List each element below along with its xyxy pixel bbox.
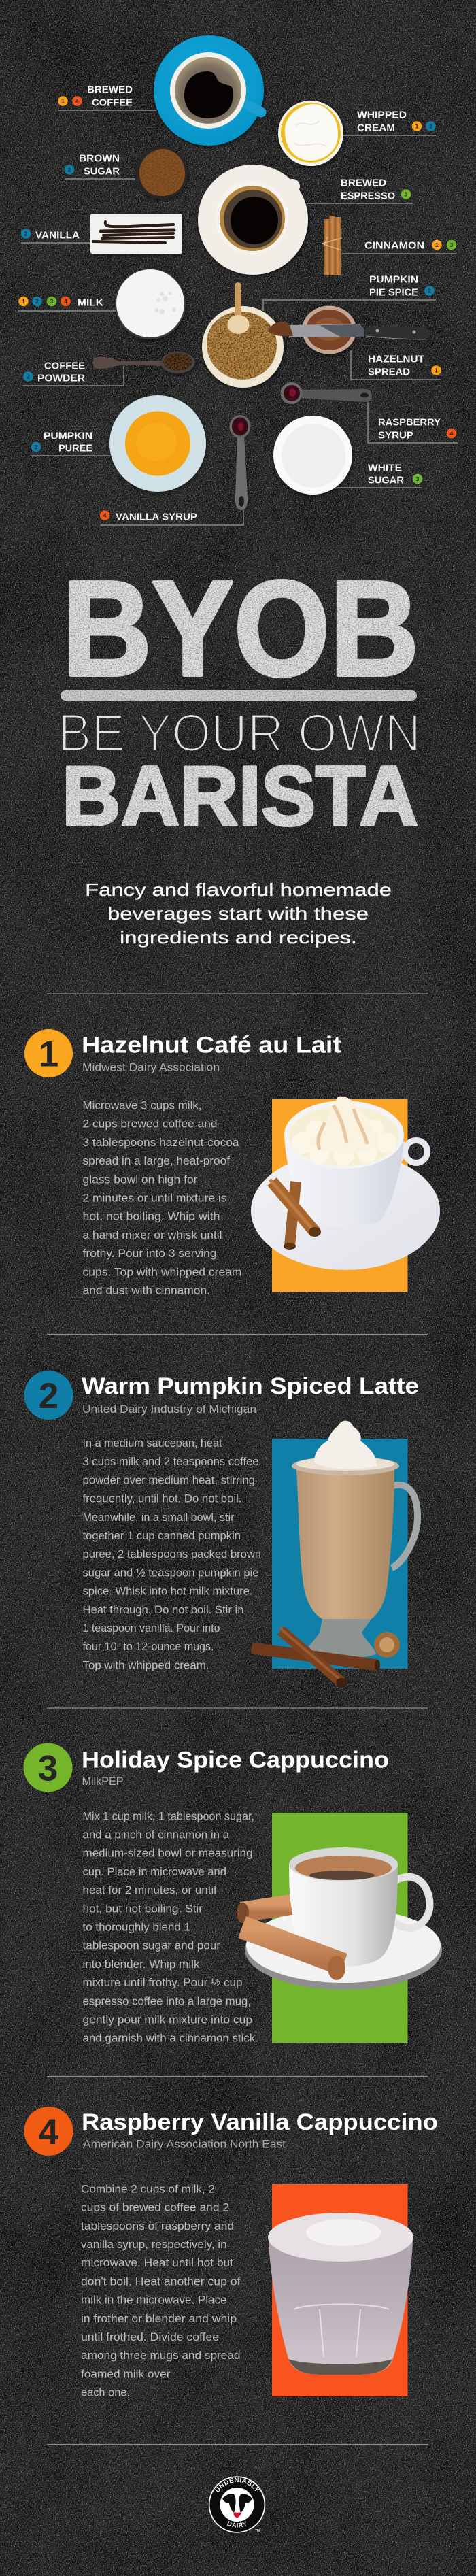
logo: Undeniably Dairy: [208, 2476, 265, 2533]
text block: recipe 2 directions: Meanwhile, in a small bowl, stir: [83, 1511, 235, 1524]
logo: Undeniably Dairy: UNDENIABLY: [215, 2477, 260, 2492]
text block: recipe 2 directions: spice. Whisk into hot milk mixture.: [83, 1586, 253, 1598]
text block: recipe 2 directions: sugar and ½ teaspoon pumpkin pie: [83, 1567, 258, 1579]
callout: white sugar: SUGAR: [368, 475, 404, 486]
callout: brewed coffee: [58, 84, 156, 110]
text block: recipe 1 directions: 2 minutes or until mixture is: [83, 1192, 227, 1204]
text block: recipe 1 directions: cups. Top with whipped cream: [83, 1266, 242, 1278]
title: BYOB Be Your Own Barista: BARISTA: [62, 750, 418, 843]
text block: recipe 4 directions: each one.: [81, 2387, 130, 2399]
text block: recipe 3 directions: to thoroughly blend 1: [83, 1921, 190, 1933]
text block: recipe 1 directions: a hand mixer or whisk until: [83, 1229, 222, 1241]
text block: recipe 2 directions: powder over medium heat, stirring: [83, 1474, 255, 1486]
text block: recipe 1 directions: 3 tablespoons hazelnut-cocoa: [83, 1137, 239, 1149]
callout: milk: 2: [35, 298, 39, 305]
text block: recipe 2 directions: [83, 1437, 261, 1671]
image: frothy glass on orange panel: [268, 2184, 413, 2396]
text block: recipe 4 directions: [81, 2183, 241, 2399]
text block: recipe 1 directions: hot, not boiling. Whip with: [83, 1211, 220, 1223]
callout: milk: 3: [50, 298, 54, 305]
icon: milk bowl: [115, 269, 186, 339]
callout: milk: [18, 297, 116, 311]
icon: brown sugar bowl: [135, 147, 188, 199]
callout: raspberry syrup: [368, 402, 458, 443]
text block: recipe 3 directions: tablespoon sugar and pour: [83, 1940, 221, 1952]
callout: cinnamon: 1: [435, 241, 439, 248]
icon: pumpkin pie spice bowl with wooden spoon: [202, 286, 284, 388]
callout: hazelnut spread: [351, 350, 441, 380]
callout: raspberry syrup: RASPBERRY: [378, 416, 441, 429]
text block: recipe 4 directions: microwave. Heat until hot but: [81, 2257, 233, 2269]
heading: recipe 2: Warm Pumpkin Spiced Latte: [82, 1373, 419, 1399]
callout: brewed espresso: 3: [405, 190, 408, 197]
text block: recipe 4 directions: milk in the microwave. Place: [81, 2294, 227, 2307]
callout: coffee powder: COFFEE: [44, 361, 85, 371]
text block: recipe 4 directions: tablespoons of raspberry and: [81, 2220, 234, 2232]
callout: raspberry syrup: 4: [450, 430, 454, 437]
callout: pumpkin pie spice: PIE SPICE: [369, 287, 418, 298]
text block: recipe 3 directions: medium-sized bowl or measuring: [83, 1847, 253, 1860]
text block: recipe 4 directions: cups of brewed coffee and 2: [81, 2202, 229, 2214]
callout: milk: MILK: [78, 297, 103, 309]
callout: pumpkin pie spice: PUMPKIN: [369, 273, 418, 286]
text block: recipe 2 directions: Top with whipped cream.: [83, 1659, 209, 1671]
callout: pumpkin pie spice: 2: [428, 287, 431, 294]
callout: brewed espresso: [307, 177, 413, 203]
callout: whipped cream: [343, 109, 436, 135]
callout: cinnamon: CINNAMON: [364, 239, 424, 252]
callout: white sugar: [337, 463, 422, 488]
tagline: [85, 880, 392, 948]
title: BYOB Be Your Own Barista: BE YOUR OWN: [58, 703, 421, 763]
callout: brewed coffee: BREWED: [87, 84, 133, 95]
text block: recipe 2 directions: four 10- to 12-ounce mugs.: [83, 1641, 214, 1653]
icon: coffee powder spoon: [93, 352, 194, 373]
callout: brewed coffee: 1: [61, 98, 65, 105]
text block: recipe 3 directions: and garnish with a cinnamon stick.: [83, 2033, 258, 2045]
text block: recipe 4 directions: until frothed. Divide coffee: [81, 2331, 219, 2343]
callout: pumpkin puree: PUREE: [58, 442, 92, 454]
image: cappuccino cup on green panel: [237, 1813, 442, 2043]
icon: vanilla syrup measuring spoon: [230, 415, 250, 510]
badge: number 1: 1: [39, 1034, 58, 1075]
text block: recipe 3 directions: [83, 1810, 258, 2045]
icon: pumpkin puree plate: [109, 395, 206, 492]
logo: Undeniably Dairy: TM: [255, 2529, 260, 2533]
callout: whipped cream: WHIPPED: [357, 109, 407, 121]
text block: recipe 1 directions: and dust with cinnamon.: [83, 1284, 210, 1297]
text block: recipe 2 directions: In a medium saucepan, heat: [83, 1437, 222, 1450]
callout: coffee powder: POWDER: [37, 373, 85, 384]
callout: brewed coffee: 4: [75, 98, 79, 105]
callout: pumpkin puree: PUMPKIN: [44, 430, 92, 442]
text block: recipe 2 directions: 3 cups milk and 2 teaspoons coffee: [83, 1456, 258, 1468]
panel: recipe 2 Warm Pumpkin Spiced Latte: [24, 1371, 419, 1688]
tagline: ingredients and recipes.: [120, 927, 357, 948]
callout: vanilla syrup: 4: [103, 512, 107, 518]
icon: whipped cream in yellow bowl: [278, 101, 343, 166]
icon: white sugar plate: [273, 416, 352, 495]
text block: recipe 3 directions: into blender. Whip milk: [83, 1958, 200, 1971]
source: recipe 2: United Dairy Industry of Michigan: [82, 1403, 256, 1416]
image: latte glass on blue panel: [252, 1421, 418, 1688]
heading: recipe 3: Holiday Spice Cappuccino: [82, 1747, 389, 1773]
source: recipe 4: American Dairy Association North East: [83, 2137, 286, 2151]
callout: brown sugar: [65, 152, 135, 179]
icon: raspberry syrup measuring spoon: [280, 382, 372, 404]
text block: recipe 4 directions: vanilla syrup, respectively, in: [81, 2239, 227, 2251]
callout: milk: 4: [64, 298, 67, 305]
badge: number 4: [24, 2107, 73, 2156]
source: recipe 3: MilkPEP: [82, 1775, 124, 1788]
callout: brown sugar: 2: [68, 166, 71, 173]
callout: vanilla: [21, 229, 90, 243]
heading: recipe 4: Raspberry Vanilla Cappuccino: [82, 2109, 438, 2135]
text block: recipe 4 directions: foamed milk over: [81, 2368, 171, 2380]
callout: hazelnut spread: SPREAD: [368, 366, 410, 378]
callout: brown sugar: SUGAR: [84, 166, 120, 177]
text block: recipe 2 directions: puree, 2 tablespoons packed brown: [83, 1548, 261, 1560]
callout: pumpkin puree: 2: [35, 444, 38, 450]
badge: number 3: [23, 1743, 72, 1792]
callout: brewed espresso: ESPRESSO: [341, 190, 395, 201]
text block: recipe 4 directions: Combine 2 cups of milk, 2: [81, 2183, 215, 2195]
callout: pumpkin puree: [31, 430, 110, 456]
icon: brewed coffee in blue cup: [154, 35, 264, 146]
text block: recipe 3 directions: Mix 1 cup milk, 1 tablespoon sugar,: [83, 1810, 254, 1822]
callout: cinnamon: 3: [450, 241, 454, 248]
text block: recipe 3 directions: and a pinch of cinnamon in a: [83, 1828, 230, 1841]
icon: cinnamon sticks bundle: [322, 216, 342, 275]
text block: recipe 3 directions: hot, but not boiling. Stir: [83, 1903, 203, 1915]
title: BYOB Be Your Own Barista: [58, 554, 421, 843]
tagline: beverages start with these: [107, 903, 369, 924]
callout: coffee powder: [23, 361, 124, 386]
panel: recipe 4 Raspberry Vanilla Cappuccino: [24, 2107, 438, 2399]
callout: coffee powder: 2: [27, 373, 30, 380]
tagline: Fancy and flavorful homemade: [85, 880, 392, 900]
callout: vanilla: 2: [24, 230, 28, 237]
callout: whipped cream: CREAM: [357, 122, 395, 133]
text block: recipe 1 directions: glass bowl on high for: [83, 1173, 198, 1186]
callout: vanilla: VANILLA: [35, 230, 80, 241]
icon: espresso cup and white saucer: [198, 165, 308, 275]
callout: cinnamon: [342, 239, 456, 254]
callout: brewed espresso: BREWED: [341, 177, 386, 189]
badge: number 3: 3: [38, 1748, 58, 1789]
callout: white sugar: WHITE: [368, 463, 402, 473]
callout: pumpkin pie spice: [263, 273, 436, 311]
text block: recipe 1 directions: [83, 1099, 242, 1297]
source: recipe 1: Midwest Dairy Association: [82, 1061, 220, 1073]
callout: whipped cream: 2: [429, 122, 432, 129]
callout: milk: 1: [22, 298, 25, 305]
text block: recipe 2 directions: Heat through. Do not boil. Stir in: [83, 1604, 243, 1616]
text block: recipe 3 directions: mixture until frothy. Pour ½ cup: [83, 1977, 242, 1989]
text block: recipe 1 directions: spread in a large, heat-proof: [83, 1155, 230, 1167]
callout: white sugar: 3: [416, 475, 420, 482]
text block: recipe 2 directions: together 1 cup canned pumpkin: [83, 1530, 241, 1542]
callout: vanilla syrup: VANILLA SYRUP: [116, 512, 197, 522]
badge: number 2: 2: [39, 1376, 58, 1416]
callout: vanilla syrup: [100, 510, 243, 525]
icon: vanilla pods on white plate: [90, 214, 182, 254]
text block: recipe 4 directions: in frother or blender and whip: [81, 2313, 237, 2325]
text block: recipe 4 directions: don't boil. Heat another cup of: [81, 2275, 241, 2288]
image: cup with whipped cream on orange panel: [251, 1097, 440, 1292]
callout: whipped cream: 1: [415, 122, 419, 129]
panel: recipe 3 Holiday Spice Cappuccino: [23, 1743, 442, 2045]
text block: recipe 1 directions: Microwave 3 cups milk,: [83, 1099, 201, 1111]
callout: raspberry syrup: SYRUP: [378, 430, 413, 441]
heading: recipe 1: Hazelnut Café au Lait: [82, 1033, 341, 1058]
callout: brown sugar: BROWN: [79, 152, 120, 165]
text block: recipe 3 directions: cup. Place in microwave and: [83, 1866, 226, 1878]
badge: number 1: [24, 1029, 73, 1077]
text block: recipe 4 directions: among three mugs and spread: [81, 2349, 241, 2362]
logo: Undeniably Dairy: DAIRY: [227, 2521, 246, 2528]
callout: brewed coffee: COFFEE: [92, 97, 133, 109]
text block: recipe 1 directions: frothy. Pour into 3 serving: [83, 1248, 216, 1260]
callout: hazelnut spread: HAZELNUT: [368, 354, 424, 365]
text block: recipe 2 directions: 1 teaspoon vanilla. Pour into: [83, 1622, 220, 1635]
title: BYOB Be Your Own Barista: BYOB: [63, 554, 419, 705]
panel: recipe 1 Hazelnut Cafe au Lait: [24, 1029, 440, 1297]
text block: recipe 1 directions: 2 cups brewed coffee and: [83, 1118, 218, 1131]
text block: recipe 3 directions: heat for 2 minutes, or until: [83, 1884, 216, 1896]
badge: number 2: [24, 1371, 73, 1420]
icon: hazelnut spread jar and knife: [268, 306, 432, 354]
callout: hazelnut spread: 1: [435, 367, 438, 374]
text block: recipe 2 directions: frequently, until hot. Do not boil.: [83, 1493, 242, 1505]
text block: recipe 3 directions: espresso coffee into a large mug,: [83, 1995, 251, 2007]
badge: number 4: 4: [39, 2112, 59, 2152]
text block: recipe 3 directions: gently pour milk mixture into cup: [83, 2013, 252, 2026]
